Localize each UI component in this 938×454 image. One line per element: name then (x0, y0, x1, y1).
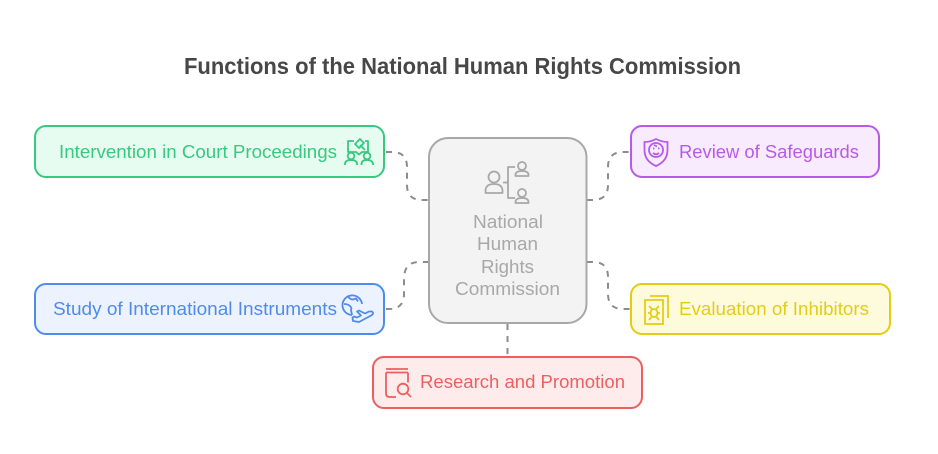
panel: Evaluation of Inhibitors (631, 284, 890, 334)
central label: National (473, 211, 543, 232)
label: Intervention in Court Proceedings (59, 141, 337, 162)
panel: Review of Safeguards (631, 126, 879, 177)
label: Research and Promotion (420, 371, 625, 392)
central label: Commission (455, 278, 560, 299)
central label: Human (477, 233, 538, 254)
label: Study of International Instruments (53, 298, 337, 319)
label: Evaluation of Inhibitors (679, 298, 869, 319)
central label: Rights (481, 256, 534, 277)
title: Functions of the National Human Rights Commission (184, 53, 741, 79)
panel: central node (429, 138, 586, 323)
panel: Study of International Instruments (35, 284, 384, 334)
connectors (386, 152, 630, 356)
icon: gavel and people (345, 139, 373, 165)
icon: document with bug (645, 296, 668, 324)
icon: shield with face (644, 139, 668, 166)
icon: organisation people (486, 162, 528, 203)
icon: book and magnifier (386, 369, 411, 397)
panel: Intervention in Court Proceedings (35, 126, 384, 177)
central label (455, 211, 560, 299)
icon: globe and plane (342, 295, 373, 322)
label: Review of Safeguards (679, 141, 859, 162)
panel: Research and Promotion (373, 357, 642, 408)
